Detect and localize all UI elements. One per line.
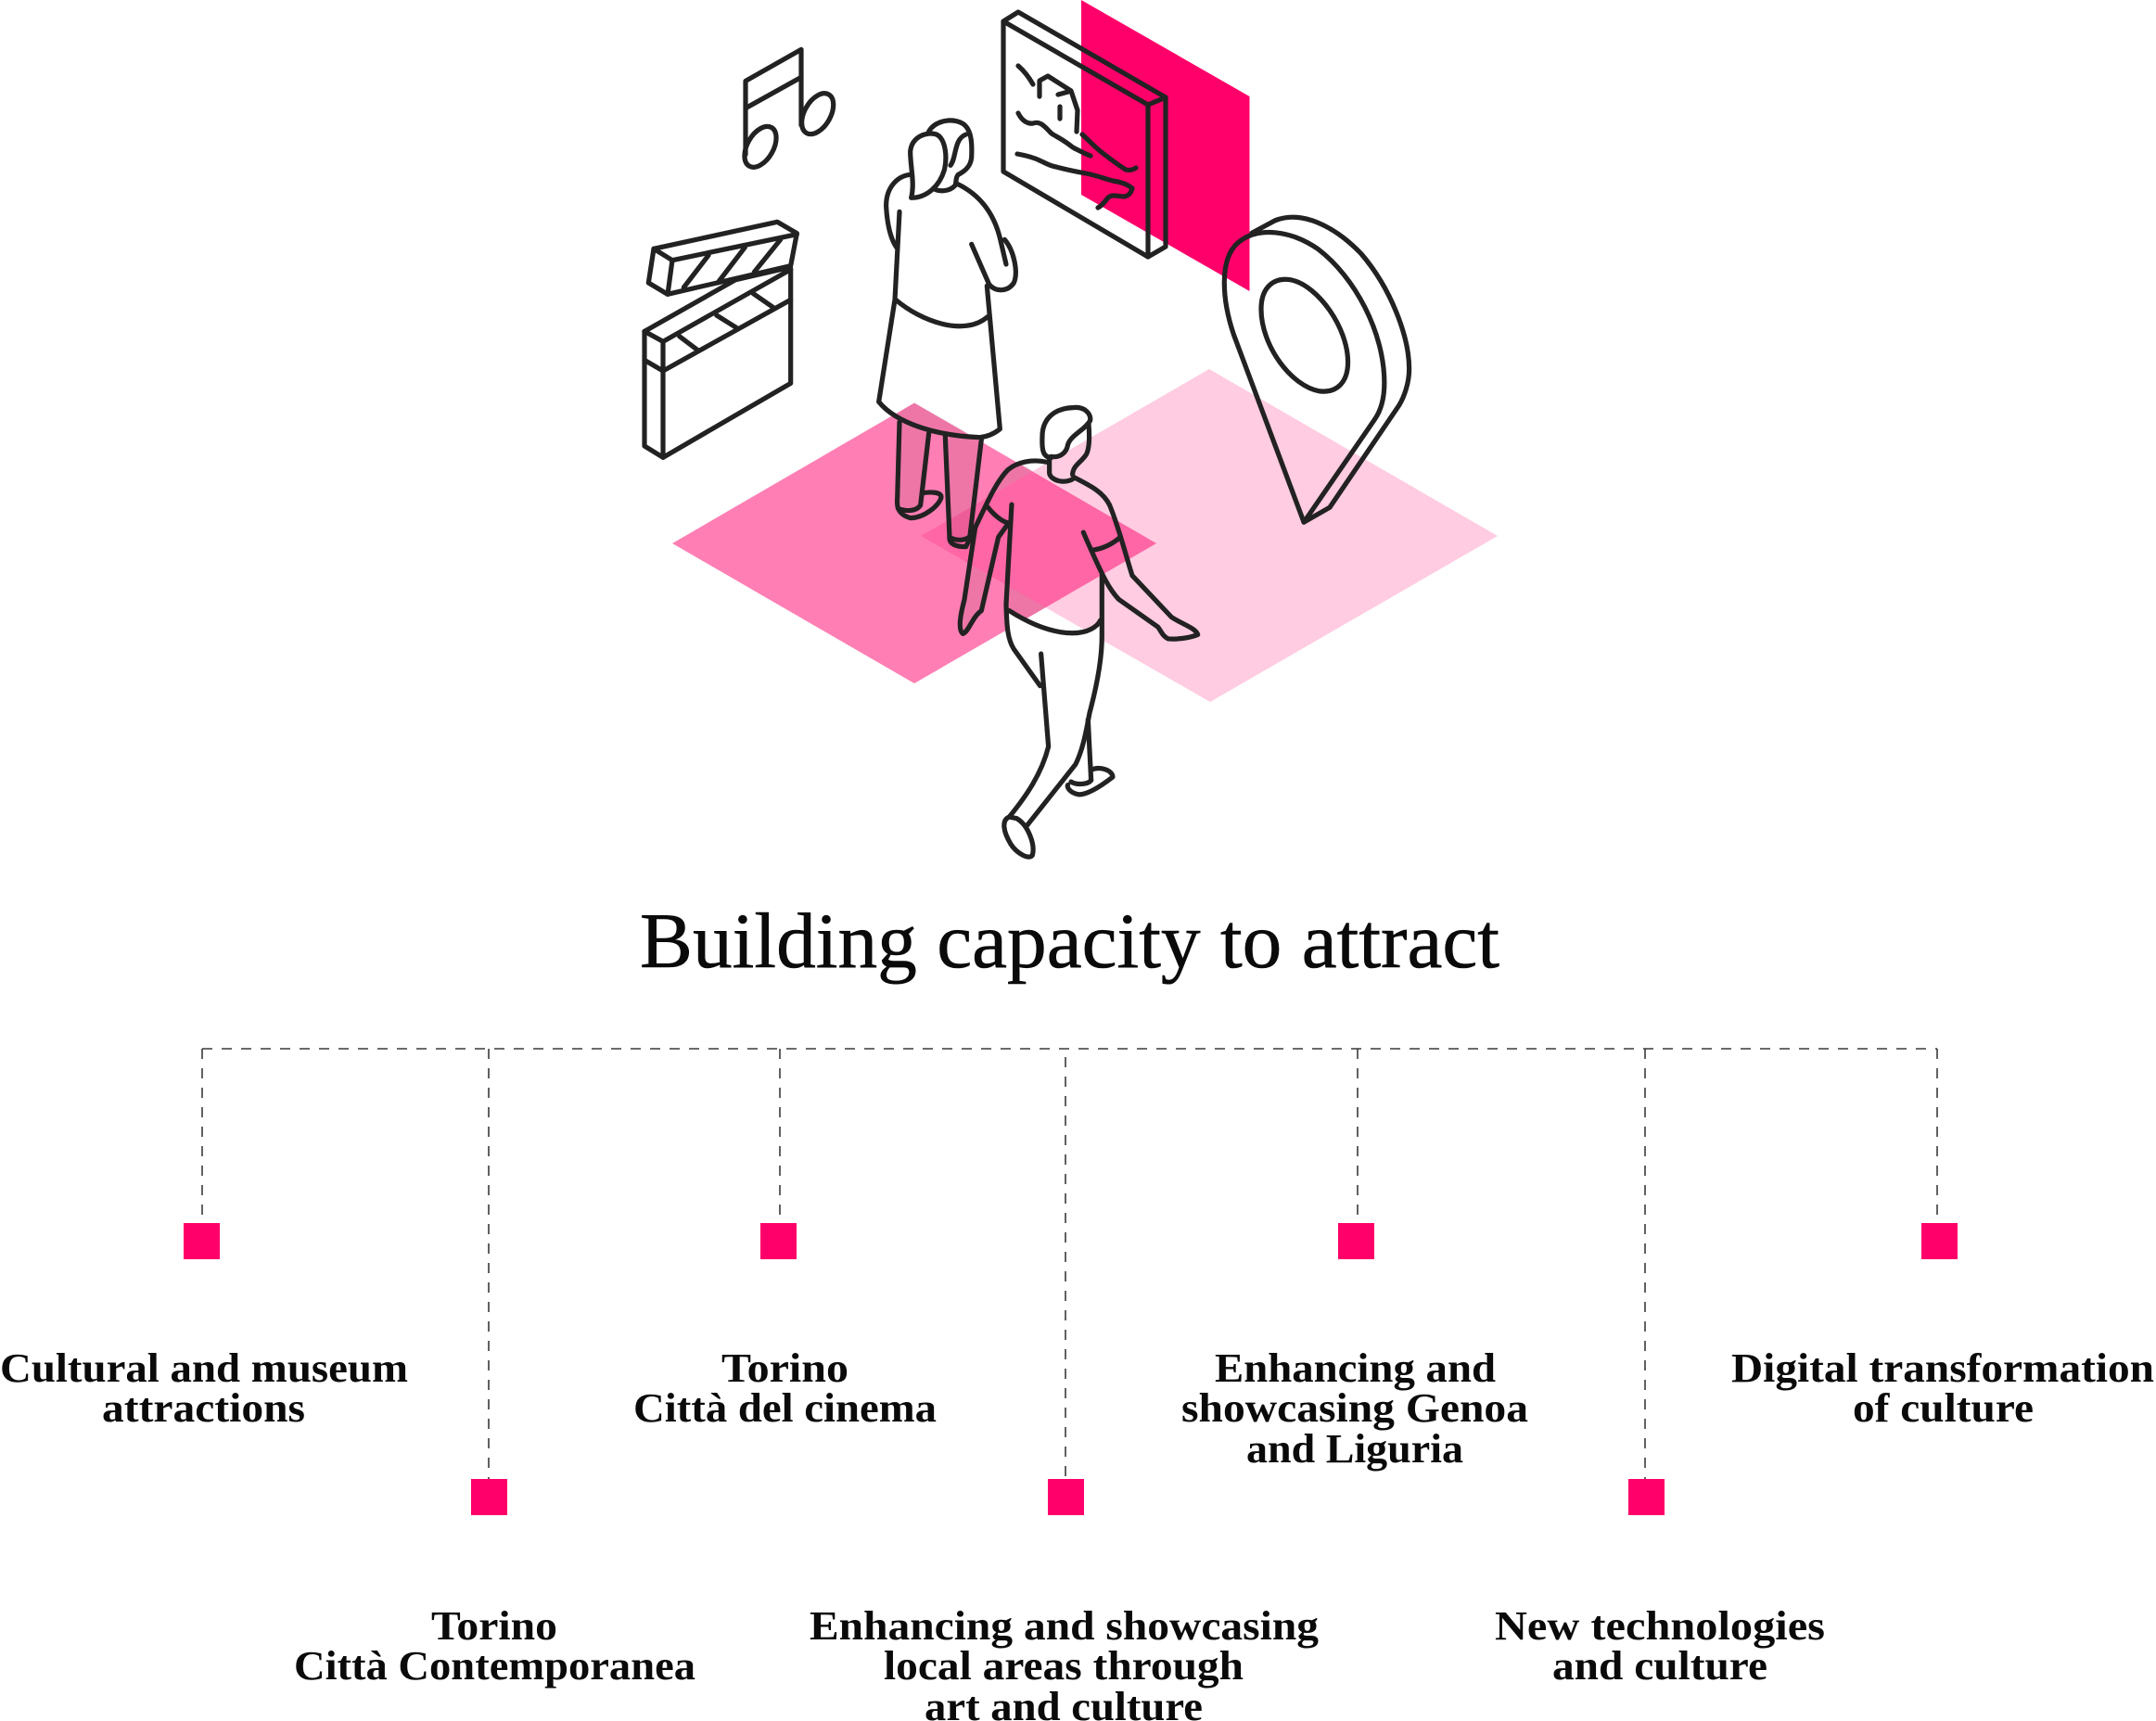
figure: woman viewing the painting	[879, 121, 1015, 547]
item: Torino Città del cinema: Città del cinema	[633, 1385, 937, 1431]
icon: film clapperboard	[644, 222, 797, 457]
title: Building capacity to attract	[640, 898, 1499, 985]
item: New technologies and culture: and culture	[1552, 1643, 1767, 1689]
item: Digital transformation of culture: of culture	[1853, 1385, 2034, 1431]
item: New technologies and culture	[1495, 1479, 1825, 1689]
icon: map location pin	[1224, 217, 1410, 522]
item: Torino Città Contemporanea	[294, 1479, 695, 1689]
item: Enhancing and showcasing local areas through art and culture: local areas through	[884, 1643, 1244, 1689]
item: Torino Città del cinema: Torino	[721, 1345, 848, 1391]
dashed connector tree	[202, 1049, 1937, 1479]
item: Enhancing and showcasing Genoa and Liguria: and Liguria	[1246, 1426, 1463, 1472]
item: Enhancing and showcasing Genoa and Liguria: Enhancing and	[1215, 1345, 1496, 1391]
item: Torino Città Contemporanea: Torino	[431, 1603, 557, 1649]
item: Digital transformation of culture: Digital transformation	[1731, 1345, 2154, 1391]
item: Enhancing and showcasing Genoa and Liguria	[1181, 1223, 1528, 1472]
woman upper body and skirt	[879, 121, 1015, 438]
item: New technologies and culture: New technologies	[1495, 1603, 1825, 1649]
woman legs and shoes	[897, 422, 981, 547]
light pink floor tile	[921, 369, 1498, 702]
icon: framed painting	[1003, 12, 1166, 257]
item: Enhancing and showcasing local areas through art and culture	[810, 1479, 1319, 1721]
item: Digital transformation of culture	[1731, 1223, 2154, 1431]
magenta wall panel	[1081, 0, 1250, 291]
item: Torino Città Contemporanea: Città Contemporanea	[294, 1643, 695, 1689]
man outline	[960, 407, 1198, 857]
illustration: people viewing culture in isometric space	[644, 0, 1498, 857]
item: Cultural and museum attractions	[0, 1223, 408, 1431]
figure: man walking	[960, 407, 1198, 857]
item: Cultural and museum attractions: Cultural and museum	[0, 1345, 408, 1391]
item: Torino Città del cinema	[633, 1223, 937, 1431]
figure shadows on floor tiles	[895, 402, 1046, 633]
item: Enhancing and showcasing local areas through art and culture: Enhancing and showcasing	[810, 1603, 1319, 1649]
man trousers fill	[1008, 611, 1102, 826]
item: Cultural and museum attractions: attractions	[102, 1385, 305, 1431]
item: Enhancing and showcasing Genoa and Liguria: showcasing Genoa	[1181, 1385, 1528, 1431]
medium pink floor tile	[672, 402, 1156, 683]
icon: music notes	[738, 49, 840, 172]
